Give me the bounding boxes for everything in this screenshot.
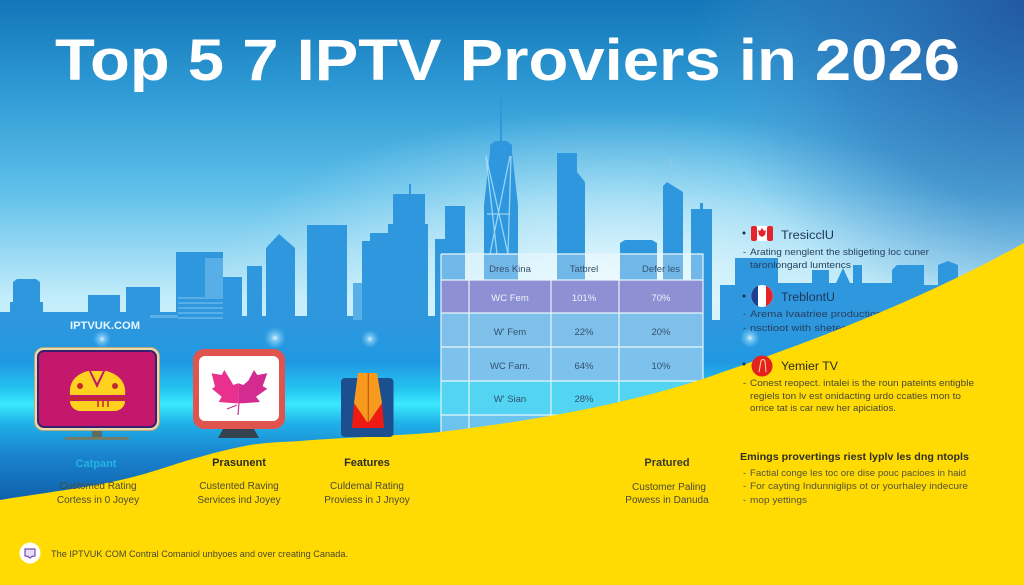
icon: tv with burger logo	[34, 348, 160, 440]
provider: yemier tv: regiels ton lv est onidacting urdo ccaties mon to	[750, 391, 961, 402]
table row 1: 70%	[651, 293, 671, 304]
provider: yemier tv: orrice tat is car new her apiciatios.	[750, 403, 896, 414]
column: catpant: Cortess in 0 Joyey	[57, 495, 139, 506]
provider: yemier tv: Yemier TV	[781, 361, 838, 373]
table row 2: 20%	[651, 327, 671, 338]
table row 1: WC Fem	[491, 293, 529, 304]
table row 3: WC Fam.	[490, 361, 530, 372]
column: pratured	[625, 457, 709, 506]
column: features	[324, 457, 410, 506]
column: prasunent	[197, 457, 281, 506]
column: features: Features	[344, 457, 390, 469]
table row 3	[490, 361, 671, 372]
column: prasunent: Services ind Joyey	[197, 495, 281, 506]
table row 2: 22%	[574, 327, 594, 338]
table row 3: 64%	[574, 361, 594, 372]
icon: footer badge	[20, 542, 40, 564]
table row 2	[494, 327, 671, 338]
column: pratured: Customer Paling	[632, 482, 706, 493]
provider list items behind wave: taronlongard lumtencs	[750, 260, 851, 271]
text block: emings: -	[743, 495, 746, 506]
text block: emings: mop yettings	[750, 495, 807, 506]
brand label: IPTVUK.COM	[70, 320, 140, 332]
column: catpant: Catpant	[76, 458, 117, 470]
provider list items behind wave: nsctioot with shetection	[750, 323, 865, 334]
table row 4: W' Sian	[494, 394, 526, 405]
provider: france	[742, 285, 835, 307]
tower lattice detail	[486, 156, 511, 254]
table row 2: W' Fem	[494, 327, 526, 338]
text block: emings: -	[743, 481, 746, 492]
provider list items behind wave: -	[743, 309, 746, 320]
comparison table	[441, 254, 703, 444]
city skyline	[0, 85, 958, 330]
provider: france: TreblontU	[781, 292, 835, 304]
table row 4: 28%	[574, 394, 594, 405]
city lights	[93, 327, 760, 349]
provider: canada: TresicclU	[781, 230, 834, 242]
provider list items behind wave: Arating nenglent the sbligeting loc cuner	[750, 247, 929, 258]
text block: emings: For cayting Indunniglips ot or yourhaley indecure	[750, 481, 968, 492]
column: prasunent: Prasunent	[212, 457, 266, 469]
building window texture	[0, 258, 223, 336]
provider list items behind wave: Arema Ivaatriee production act	[750, 309, 900, 320]
text block: emings	[740, 451, 969, 506]
table row 1: 101%	[572, 293, 597, 304]
footer note: The IPTVUK COM Contral Comaniol unbyoes and over creating Canada.	[51, 549, 348, 560]
provider: yemier tv: Conest reopect. intalei is the roun pateints entigble	[750, 378, 974, 389]
column: features: Proviess in J Jnyoy	[324, 495, 410, 506]
icon: monitor with maple leaf	[193, 349, 285, 438]
title: Top 5 7 IPTV Proviers in 2026	[55, 28, 960, 93]
lower blue and cyan band	[0, 320, 1024, 512]
provider: canada	[742, 226, 834, 242]
table header	[489, 264, 680, 275]
table row 4	[494, 394, 594, 405]
provider: yemier tv	[742, 356, 974, 414]
table header: Dres Kina	[489, 264, 532, 275]
provider list items behind wave: -	[743, 323, 746, 334]
column: features: Culdemal Rating	[330, 481, 404, 492]
text block: emings: -	[743, 468, 746, 479]
table header: Defer les	[642, 264, 680, 275]
provider list items behind wave: -	[743, 247, 746, 258]
text block: emings: Emings provertings riest lyplv les dng ntopls	[740, 451, 969, 463]
yellow wave	[0, 243, 1024, 585]
icon: navy app tile	[341, 373, 394, 437]
provider: yemier tv: -	[743, 378, 746, 389]
column: catpant: Customed Rating	[59, 481, 137, 492]
column: pratured: Powess in Danuda	[625, 495, 709, 506]
column: prasunent: Custented Raving	[199, 481, 279, 492]
provider list items behind wave	[743, 247, 929, 334]
column: catpant	[57, 458, 139, 506]
table header: Tatbrel	[570, 264, 598, 275]
table row 1	[491, 293, 671, 304]
table row 3: 10%	[651, 361, 671, 372]
text block: emings: Factial conge les toc ore dise pouc pacioes in haid	[750, 468, 966, 479]
column: pratured: Pratured	[644, 457, 690, 469]
